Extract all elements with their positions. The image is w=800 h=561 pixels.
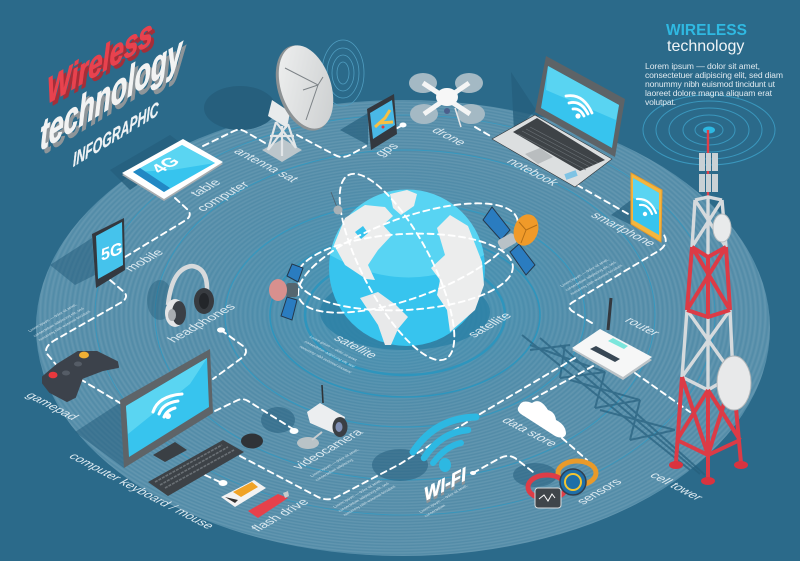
icon: smartphone	[631, 173, 662, 242]
device labels: gps	[371, 140, 402, 158]
small lorem text blocks: nonummy nibh euismod tincidunt	[342, 484, 397, 516]
icon: right satellite	[483, 207, 542, 275]
orbit paths	[285, 159, 531, 375]
device labels: router	[621, 315, 665, 338]
heading and intro text block: laoreet dolore magna aliquam erat	[645, 88, 773, 98]
title: Wireless technology infographic: Wireless	[50, 14, 156, 116]
small lorem text blocks: Lorem ipsum — dolor sit amet,	[418, 484, 469, 513]
icon: gamepad	[43, 352, 118, 401]
icon: tablet 4G	[122, 139, 223, 201]
title: Wireless technology infographic: Wireless	[47, 11, 153, 113]
small lorem text blocks: Lorem ipsum — dolor sit amet,	[27, 303, 78, 332]
connector dots	[217, 122, 476, 486]
device labels: data store	[498, 415, 562, 449]
title: Wireless technology infographic: INFOGRAPHIC	[73, 96, 159, 172]
device labels: sensors	[573, 476, 626, 506]
device labels: notebook	[503, 156, 564, 188]
small lorem text blocks: nonummy nibh euismod tincidunt	[37, 309, 92, 341]
small lorem text blocks: Lorem ipsum — dolor sit amet,	[332, 479, 383, 508]
small lorem text blocks: nonummy nibh euismod tincidunt	[298, 345, 354, 374]
icon: sensors wristbands	[528, 461, 596, 508]
icon: videocamera	[297, 385, 348, 449]
small lorem text blocks: nonummy nibh euismod tincidunt	[569, 263, 624, 295]
heading and intro text block: technology	[667, 38, 744, 55]
icon: antenna dish	[262, 38, 364, 162]
small lorem text blocks: consectetuer adipiscing elit, sed	[32, 307, 85, 337]
device labels: smartphone	[587, 210, 660, 248]
icon: cell tower	[643, 95, 775, 485]
icon: small sputnik	[331, 192, 342, 214]
icon: gps phone	[367, 94, 397, 150]
title: Wireless technology infographic: technology	[40, 24, 184, 160]
device labels: flash drive	[248, 496, 312, 533]
heading and intro text block	[645, 22, 783, 107]
icon: notebook laptop	[492, 56, 625, 187]
small lorem text blocks: Lorem ipsum — dolor sit amet,	[559, 258, 610, 287]
device labels: computer	[193, 179, 253, 213]
device labels: satellite	[330, 333, 382, 360]
icon: headphones	[165, 266, 214, 327]
device labels: satellite	[464, 310, 515, 339]
heading and intro text block: consectetuer adipiscing elit, sed diam	[645, 70, 783, 80]
device labels: mobile	[121, 247, 167, 273]
icon: keyboard and mouse	[148, 434, 263, 496]
wi-fi label: WI-FI	[423, 466, 468, 508]
icon: cloud	[518, 401, 566, 438]
icon: desktop monitor	[120, 349, 213, 468]
icon: left satellite	[269, 264, 303, 320]
small lorem text blocks: Lorem ipsum — dolor sit amet,	[309, 448, 360, 477]
device labels: gamepad	[22, 390, 83, 422]
icon: router	[572, 298, 652, 380]
device labels: antenna sat	[230, 146, 303, 184]
globe	[329, 189, 485, 346]
icon: drone	[409, 73, 485, 127]
heading and intro text block: WIRELESS	[666, 22, 747, 39]
icon: mobile 5G	[92, 218, 125, 288]
icon: flash drive and card	[221, 480, 289, 518]
device labels: headphones	[164, 301, 239, 344]
small lorem text blocks: consectetuer	[423, 503, 447, 517]
device labels: table	[187, 177, 224, 198]
small lorem text blocks: consectetuer adipiscing elit, sed	[564, 261, 617, 291]
device labels: computer keyboard / mouse	[65, 451, 219, 531]
icon: tablet 4G: 4G	[146, 154, 184, 176]
panel: hatched floor disc	[36, 100, 770, 556]
device labels: videocamera	[289, 426, 367, 471]
title: Wireless technology infographic: technology	[43, 28, 187, 164]
device labels: cell tower	[646, 470, 708, 503]
icon: mobile 5G: 5G	[101, 238, 123, 265]
small lorem text blocks: consectetuer adipiscing	[314, 458, 354, 481]
heading and intro text block: Lorem ipsum — dolor sit amet,	[645, 61, 760, 71]
icon: wi-fi symbol	[413, 417, 476, 472]
small lorem text blocks: Lorem ipsum — dolor sit amet,	[308, 335, 360, 362]
heading and intro text block: nonummy nibh euismod tincidunt ut	[645, 79, 776, 89]
device labels: drone	[428, 125, 470, 147]
heading and intro text block: volutpat.	[645, 97, 676, 107]
wi-fi label: WI-FI	[423, 463, 468, 505]
device labels	[22, 125, 708, 533]
shadows on the floor	[50, 72, 705, 487]
small lorem text blocks: consectetuer adipiscing elit, sed	[303, 340, 357, 368]
small lorem text blocks	[27, 258, 624, 517]
dashed connector lines	[46, 125, 690, 499]
small lorem text blocks: consectetuer adipiscing elit, sed	[337, 482, 390, 512]
